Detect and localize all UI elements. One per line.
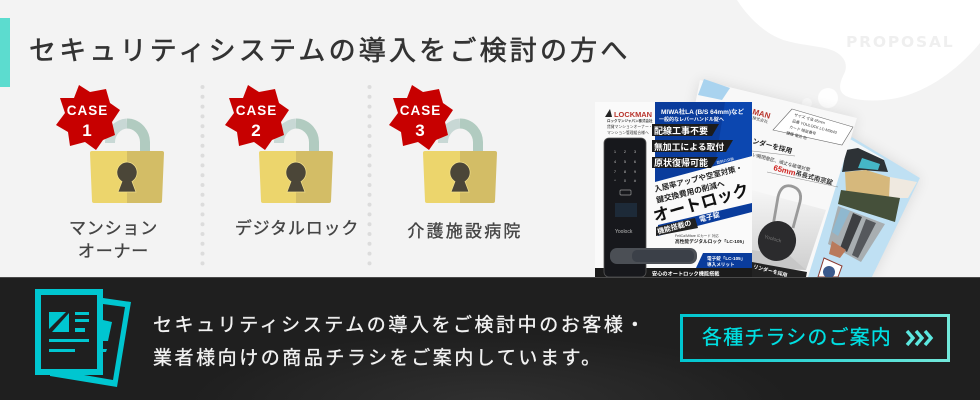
case 2 icon: padlock with badge: CASE — [236, 103, 277, 118]
description text — [153, 314, 647, 369]
flyer 1 (front): 7 — [614, 169, 617, 174]
button: flyer guide — [680, 314, 950, 362]
flyer 1 (front): 一般的なレバーハンドル錠へ — [659, 116, 724, 123]
background blob: white decorative shape — [738, 0, 980, 108]
flyer 1 (front): 1 — [614, 149, 617, 154]
flyer 2 (middle): カード 暗証番号 — [789, 124, 817, 136]
case 3 icon: padlock with badge: 3 — [415, 121, 425, 140]
case 1 icon: padlock with badge: CASE — [67, 103, 108, 118]
flyer 1 (front) — [595, 102, 752, 278]
flyer 1 (front): LOCKMAN — [614, 110, 652, 119]
flyer 1 (front): 4 — [614, 159, 617, 164]
title: セキュリティシステムの導入をご検討の方へ — [29, 36, 631, 66]
button label: 各種チラシのご案内 — [702, 327, 892, 349]
flyer 1 (front): 6 — [634, 159, 637, 164]
case 3 icon: padlock with badge — [389, 85, 497, 203]
flyer 1 (front): 9 — [634, 169, 637, 174]
description text: セキュリティシステムの導入をご検討中のお客様・ — [153, 315, 647, 336]
flyer 1 (front): マンション管理組合様へ — [607, 130, 649, 135]
flyer 1 (front): 0 — [624, 178, 627, 183]
flyer 1 (front): 導入メリット — [707, 261, 735, 268]
flyer 2 (middle): い開閉意匠、頑丈な破壊対策 — [751, 151, 811, 173]
flyer 1 (front): 鍵交換費用の削減へ — [655, 178, 726, 205]
case 3 icon: padlock with badge: CASE — [400, 103, 441, 118]
flyer 1 (front): 錠前の交換 — [716, 156, 735, 165]
flyer 2 (middle): MAN — [751, 107, 772, 121]
flyer 1 (front): 機能搭載の — [656, 218, 692, 236]
flyer 1 (front): 高性能デジタルロック「LC-105」 — [675, 238, 747, 245]
flyer 2 (middle): サイズ 寸法 65mm — [794, 112, 825, 125]
flyers illustration — [595, 79, 920, 277]
case 3 label: 介護施設病院 — [407, 222, 523, 241]
flyer 1 (front): 配線工事不要 — [654, 125, 708, 136]
flyer 1 (front): 8 — [624, 169, 627, 174]
icon: triple chevron arrow — [906, 330, 934, 346]
flyer 1 (front): 2 — [624, 149, 627, 154]
flyer 2 (middle): 品番 YOULOCK LC-M3643 — [792, 118, 837, 135]
case 1 icon: padlock with badge: 1 — [82, 121, 92, 140]
flyer 2 (middle): ンダーを採用 — [751, 136, 793, 156]
flyer 2 (middle): 吊長式南京錠 — [794, 168, 834, 187]
flyer 1 (front): 入居率アップや空室対策・ — [653, 162, 744, 194]
flyer 3 (back) — [808, 137, 920, 277]
background blob: white decorative shape: PROPOSAL — [846, 33, 954, 51]
flyer 1 (front): 5 — [624, 159, 627, 164]
flyer 1 (front): 無加工による取付 — [654, 141, 724, 152]
description text: 業者様向けの商品チラシをご案内しています。 — [153, 348, 603, 369]
icon: documents — [35, 289, 131, 387]
flyer 1 (front): ドアに穴不要 — [715, 160, 737, 170]
case 1 label: マンション — [69, 219, 158, 238]
flyer 1 (front): 電子錠「LC-105」 — [707, 255, 745, 262]
flyer 1 (front): 3 — [634, 149, 637, 154]
flyer 2 (middle): 65mm — [772, 163, 797, 178]
flyer 1 (front): * — [614, 178, 616, 183]
flyer 1 (front): 電子錠 — [698, 211, 721, 224]
flyer 1 (front): Yoolock — [615, 229, 633, 235]
case 1 label — [69, 219, 158, 261]
flyer 2 (middle) — [660, 79, 857, 279]
case 2 icon: padlock with badge — [225, 85, 333, 203]
flyer 1 (front): 原状復帰可能 — [654, 157, 708, 168]
case 2 icon: padlock with badge: 2 — [251, 121, 261, 140]
flyer 1 (front): FeliCa/Mifare ICカード 対応 — [675, 233, 719, 238]
flyer 2 (middle): 株式会社 — [752, 114, 769, 124]
flyer 1 (front): MIWA社LA (B/S 64mm)など — [661, 108, 744, 116]
flyer 1 (front): オートロック — [651, 180, 751, 226]
case 1 label: オーナー — [78, 242, 149, 261]
case 1 icon: padlock with badge — [56, 85, 164, 203]
case 2 label: デジタルロック — [235, 219, 359, 238]
dark bottom band — [0, 277, 980, 400]
flyer 1 (front): # — [634, 178, 637, 183]
flyer 2 (middle): 鍵種 電池 他 — [786, 130, 808, 140]
teal accent bar — [0, 18, 10, 87]
flyer 2 (middle): Yoolock — [763, 234, 782, 245]
flyer 1 (front): ロックマンジャパン株式会社 — [607, 118, 653, 123]
flyer 1 (front): 賃貸マンションオーナー・ — [607, 124, 653, 129]
